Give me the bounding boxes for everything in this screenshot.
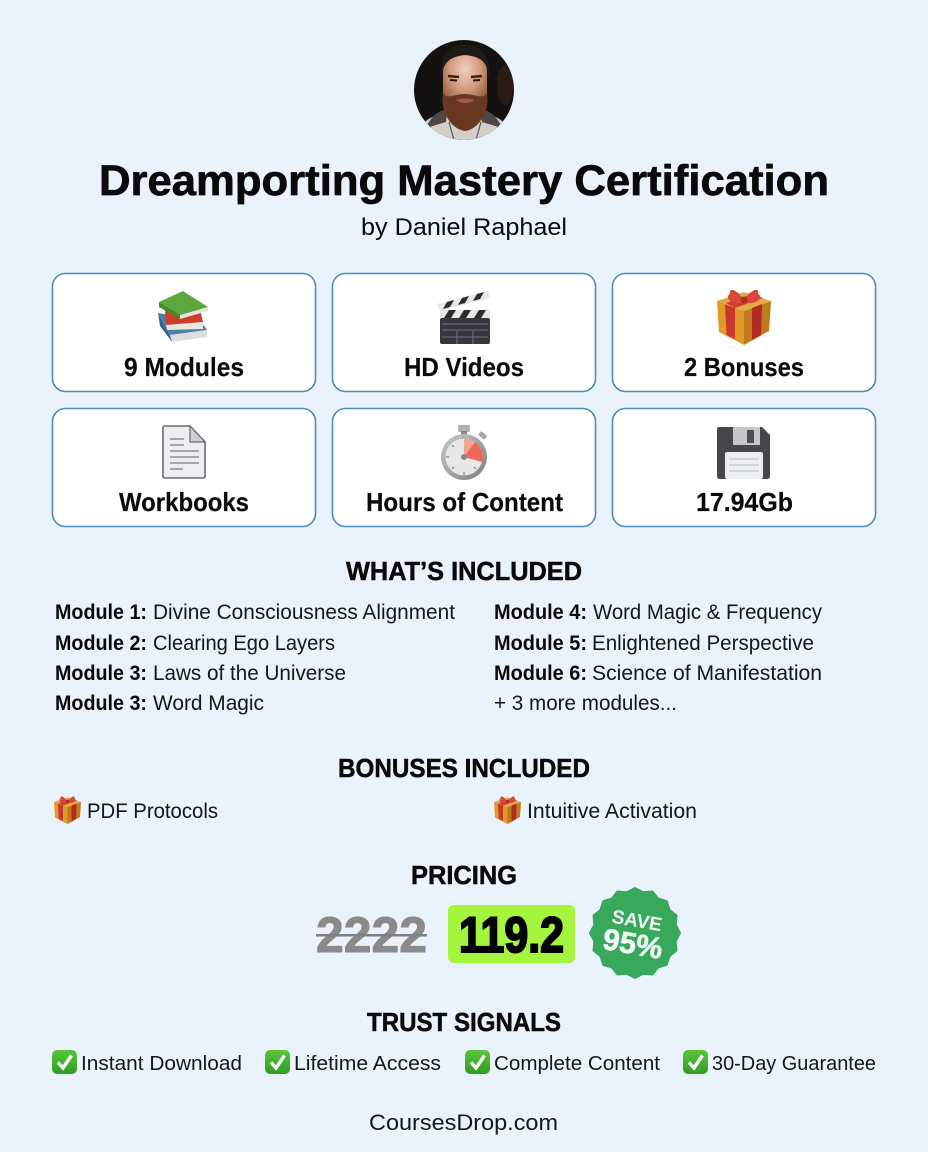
card: 17.94Gb bbox=[612, 408, 876, 526]
module 4: Module 4: bbox=[494, 601, 587, 624]
module 3 bbox=[55, 662, 346, 685]
module 3: Laws of the Universe bbox=[153, 662, 346, 685]
bonus: Intuitive Activation: Intuitive Activation bbox=[527, 800, 697, 823]
module 5: Module 5: bbox=[494, 632, 587, 655]
module 6 bbox=[494, 662, 822, 685]
heading: bonuses included: BONUSES INCLUDED bbox=[338, 753, 590, 783]
module 3 word magic: Module 3: bbox=[55, 692, 147, 715]
portrait photo bbox=[414, 40, 514, 140]
module 5 bbox=[494, 632, 814, 655]
old price: 2222 bbox=[316, 907, 427, 963]
card: 17.94Gb: 17.94Gb bbox=[696, 487, 793, 517]
save badge: SAVE bbox=[610, 907, 663, 936]
module 5: Enlightened Perspective bbox=[592, 632, 814, 655]
save badge bbox=[590, 888, 680, 978]
card: 2 Bonuses: 2 Bonuses bbox=[684, 352, 804, 382]
heading: trust signals: TRUST SIGNALS bbox=[367, 1007, 561, 1037]
card: Hours of Content bbox=[332, 408, 596, 526]
heading: what's included: WHAT’S INCLUDED bbox=[346, 556, 582, 586]
card: 2 Bonuses bbox=[612, 274, 876, 392]
trust: lifetime access: Lifetime Access bbox=[294, 1052, 441, 1075]
module 4: Word Magic & Frequency bbox=[593, 601, 822, 624]
trust: 30-day guarantee: 30-Day Guarantee bbox=[712, 1052, 876, 1075]
module 3 word magic: Word Magic bbox=[153, 692, 264, 715]
module 2: Module 2: bbox=[55, 632, 147, 655]
card: HD Videos: HD Videos bbox=[404, 352, 524, 382]
footer website: CoursesDrop.com bbox=[369, 1110, 558, 1135]
card: Hours of Content: Hours of Content bbox=[366, 487, 563, 517]
title: Dreamporting Mastery Certification bbox=[99, 157, 829, 205]
module 1: Divine Consciousness Alignment bbox=[153, 601, 455, 624]
module list bbox=[55, 601, 822, 715]
trust: instant download: Instant Download bbox=[81, 1052, 242, 1075]
module 2 bbox=[55, 632, 335, 655]
bonus: PDF Protocols: PDF Protocols bbox=[87, 800, 218, 823]
module 3: Module 3: bbox=[55, 662, 147, 685]
card: 9 Modules bbox=[52, 274, 316, 392]
module 2: Clearing Ego Layers bbox=[153, 632, 335, 655]
module 3 word magic bbox=[55, 692, 264, 715]
card: Workbooks: Workbooks bbox=[119, 487, 249, 517]
module 6: Module 6: bbox=[494, 662, 587, 685]
card: Workbooks bbox=[52, 408, 316, 526]
module 1: Module 1: bbox=[55, 601, 147, 624]
save badge: 95% bbox=[600, 923, 665, 966]
module 6: Science of Manifestation bbox=[592, 662, 822, 685]
panel: feature cards bbox=[52, 274, 876, 526]
module 4 bbox=[494, 601, 822, 624]
bonus: Intuitive Activation bbox=[494, 796, 697, 824]
card: 9 Modules: 9 Modules bbox=[124, 352, 244, 382]
heading: pricing: PRICING bbox=[411, 860, 517, 890]
trust: complete content: Complete Content bbox=[494, 1052, 660, 1075]
subtitle: by Daniel Raphael bbox=[361, 214, 567, 241]
card: HD Videos bbox=[332, 274, 596, 392]
current price: 119.2 bbox=[459, 907, 564, 963]
bonus: PDF Protocols bbox=[54, 796, 218, 824]
more modules: + 3 more modules... bbox=[494, 692, 677, 715]
